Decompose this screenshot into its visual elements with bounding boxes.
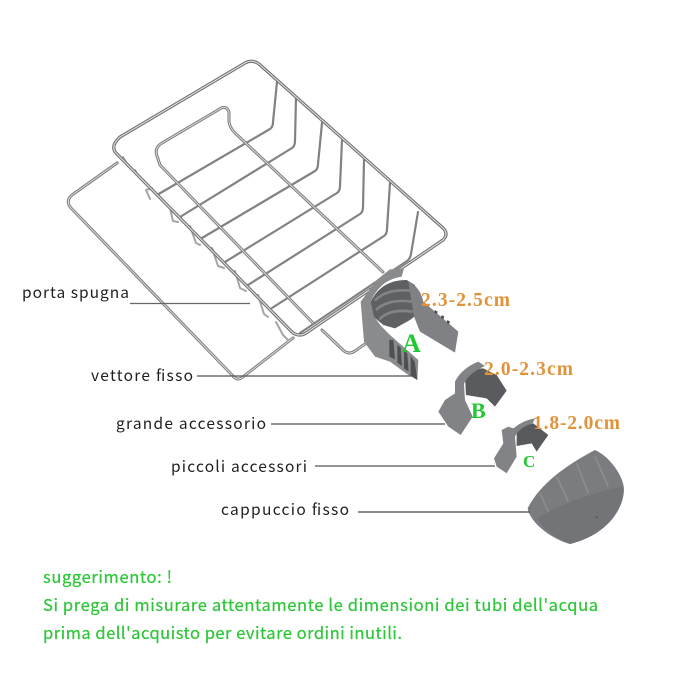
clamp B bbox=[438, 362, 507, 435]
suggestion text block: Si prega di misurare attentamente le dimensioni dei tubi dell'acqua bbox=[43, 592, 598, 616]
fixed cap bbox=[528, 450, 624, 544]
letter B: B bbox=[471, 398, 486, 423]
dimension label A: 2.3-2.5cm bbox=[421, 290, 510, 311]
suggestion text block: prima dell'acquisto per evitare ordini inutili. bbox=[43, 620, 402, 644]
label: cappuccio fisso: cappuccio fisso bbox=[221, 498, 349, 520]
label: vettore fisso: vettore fisso bbox=[91, 364, 193, 386]
sponge holder wire rack bbox=[68, 61, 446, 379]
dimension label C: 1.8-2.0cm bbox=[533, 413, 620, 434]
label: grande accessorio: grande accessorio bbox=[116, 412, 266, 434]
suggestion text block: suggerimento: ! bbox=[43, 564, 172, 588]
suggestion text block bbox=[43, 564, 598, 644]
letter C: C bbox=[523, 452, 535, 471]
label: piccoli accessori: piccoli accessori bbox=[171, 455, 307, 477]
label: porta spugna: porta spugna bbox=[22, 281, 129, 303]
clamp A bbox=[361, 268, 458, 380]
letter A: A bbox=[402, 329, 421, 358]
dimension label B: 2.0-2.3cm bbox=[484, 359, 573, 380]
clamp C bbox=[494, 418, 548, 473]
